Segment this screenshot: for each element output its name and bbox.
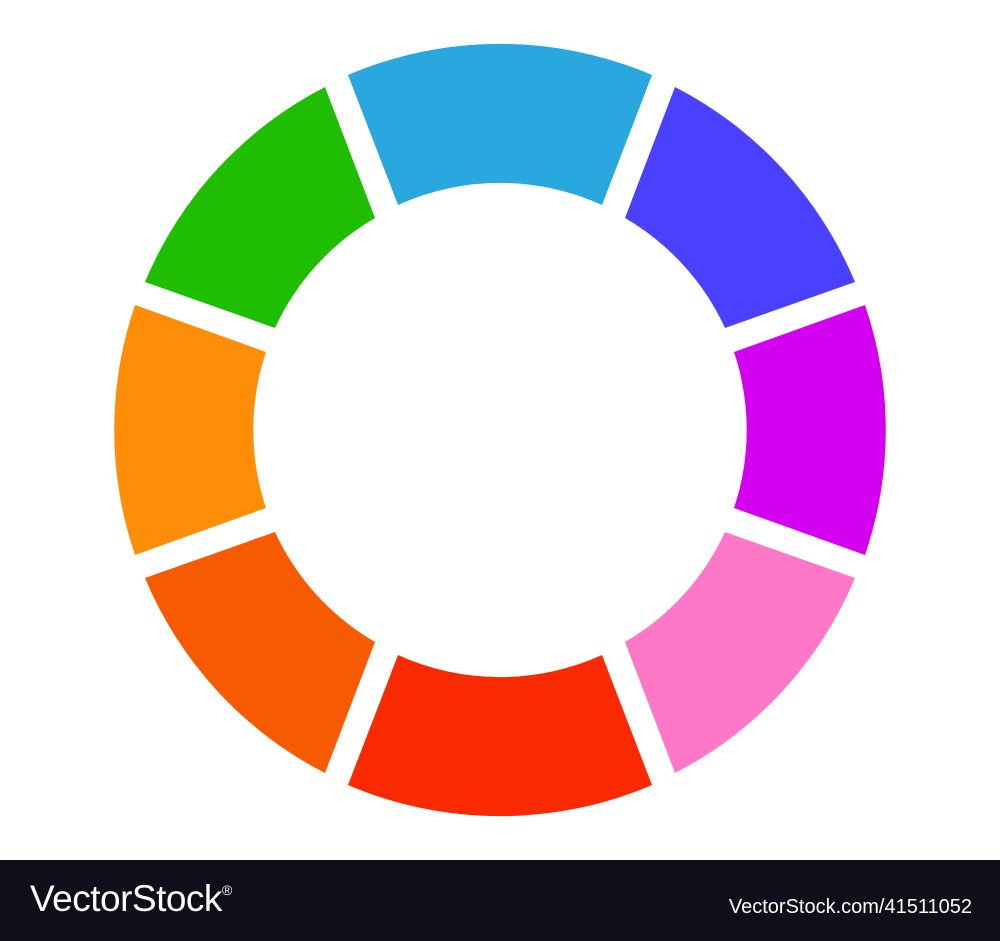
segment: bottom red <box>348 655 652 816</box>
segment: bottom-right pink <box>625 532 855 773</box>
segment: top-left green <box>145 87 375 328</box>
segment: left orange <box>114 305 266 555</box>
footer url: VectorStock.com/41511052 <box>729 896 972 918</box>
footer bar <box>0 860 1000 941</box>
segment: top-right indigo <box>625 87 855 328</box>
segment: bottom-left orange-red <box>145 532 375 773</box>
segment: top blue <box>348 44 652 205</box>
segment: right purple <box>734 305 886 555</box>
footer logo: VectorStock® <box>30 878 232 919</box>
